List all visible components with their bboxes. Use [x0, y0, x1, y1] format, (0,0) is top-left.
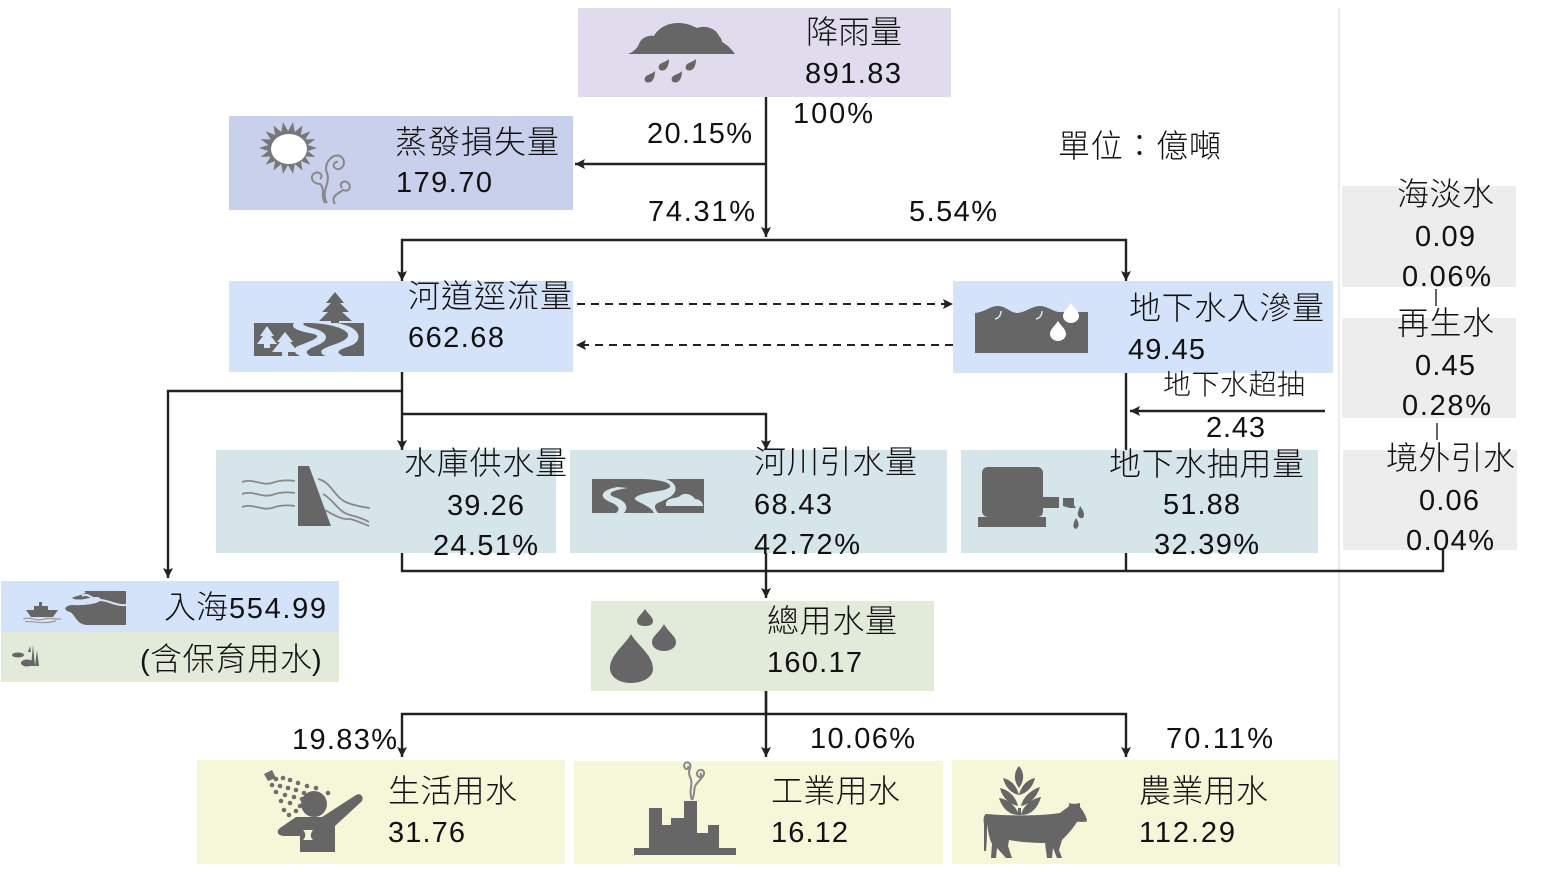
label: groundwater over-extraction [1163, 363, 1305, 444]
icon: dam [242, 466, 370, 526]
label: conservation water: 含保育用水 [150, 634, 312, 680]
panel: industrial water [574, 761, 943, 864]
value: total water use: 160.17 [767, 647, 862, 679]
label: 70.11 percent: 70.11% [1166, 723, 1273, 755]
panel: reclaimed water [1342, 298, 1516, 422]
heading: river intake: 河川引水量 [754, 437, 917, 483]
icon: ground and droplets [975, 303, 1088, 353]
value: river runoff: 662.68 [408, 322, 504, 354]
share: reclaimed water: 0.28% [1402, 390, 1491, 422]
icon: wheat and cow [984, 766, 1087, 858]
heading: evaporation: 蒸發損失量 [395, 117, 559, 163]
arrow: to reservoir [401, 372, 403, 450]
arrow: to river intake [402, 414, 766, 450]
panel: sea outflow [1, 581, 339, 682]
heading: groundwater use: 地下水抽用量 [1109, 439, 1304, 485]
value: river intake: 68.43 [754, 489, 832, 521]
label: 100 percent: 100% [793, 98, 873, 130]
share: desalination: 0.06% [1402, 261, 1491, 293]
label: 20.15 percent: 20.15% [647, 118, 752, 150]
icon: factory and smoke [634, 762, 736, 855]
share: groundwater use: 32.39% [1154, 529, 1259, 561]
heading: domestic water: 生活用水 [388, 766, 517, 812]
panel: river runoff [229, 271, 573, 372]
panel: evaporation [229, 116, 573, 210]
icon: fish and reeds [12, 645, 39, 666]
heading: reservoir supply: 水庫供水量 [404, 438, 567, 484]
label: sea outflow: 554.99 [229, 593, 326, 625]
label: 10.06 percent: 10.06% [810, 723, 915, 755]
line: desalination to reclaimed [1435, 289, 1437, 306]
heading: groundwater infiltration: 地下水入滲量 [1129, 283, 1324, 329]
icon: ship and coast [23, 591, 126, 625]
heading: river runoff: 河道逕流量 [408, 271, 572, 317]
line: groundwater to pumping [1125, 373, 1127, 450]
heading: agricultural water: 農業用水 [1139, 766, 1268, 812]
value: groundwater infiltration: 49.45 [1128, 334, 1205, 366]
panel: domestic water [197, 760, 565, 864]
panel: imported water [1343, 433, 1517, 557]
share: reservoir supply: 24.51% [433, 530, 538, 562]
value: desalination: 0.09 [1415, 221, 1475, 253]
label: 19.83 percent: 19.83% [292, 724, 397, 756]
icon: sun and vapour [259, 122, 350, 204]
value: imported water: 0.06 [1419, 485, 1479, 517]
panel: groundwater infiltration [953, 281, 1333, 373]
line: reclaimed to imported [1436, 423, 1438, 440]
share: river intake: 42.72% [754, 529, 860, 561]
value: reclaimed water: 0.45 [1415, 350, 1475, 382]
heading: desalination: 海淡水 [1397, 169, 1494, 215]
panel: reservoir supply [216, 438, 567, 562]
label: 74.31 percent: 74.31% [648, 196, 755, 228]
icon: rain cloud [628, 23, 735, 82]
panel: river intake [570, 437, 947, 561]
arrow: groundwater to river dashed [576, 344, 953, 346]
label: conservation water: ( [140, 645, 150, 677]
arrow: river to groundwater dashed [577, 303, 953, 305]
arrow: to evaporation [575, 163, 766, 165]
flow lines and arrows [168, 97, 1443, 757]
icon: river and trees [254, 292, 364, 356]
arrow: to domestic [402, 691, 766, 757]
icon: person showering [264, 770, 363, 852]
label: conservation water: ) [312, 645, 322, 677]
heading: industrial water: 工業用水 [771, 766, 900, 812]
arrow: rain to river and groundwater split [765, 97, 767, 237]
heading: imported water: 境外引水 [1386, 433, 1515, 479]
line: supply collector [402, 550, 1443, 571]
icon: pump [978, 467, 1084, 529]
value: groundwater use: 51.88 [1163, 489, 1240, 521]
panel: desalination [1342, 169, 1516, 293]
label: unit: 單位：億噸 [1058, 121, 1221, 167]
arrow: to sea [168, 391, 402, 578]
value: rainfall: 891.83 [805, 58, 901, 90]
value: industrial water: 16.12 [771, 817, 848, 849]
heading: total water use: 總用水量 [767, 596, 897, 642]
arrow: over-extraction [1130, 410, 1325, 412]
value: domestic water: 31.76 [388, 817, 465, 849]
share: imported water: 0.04% [1406, 525, 1494, 557]
panel: groundwater use [961, 439, 1318, 561]
panel: agricultural water [952, 760, 1338, 864]
arrow: to groundwater infiltration [766, 240, 1126, 281]
value: evaporation: 179.70 [396, 167, 492, 199]
label: groundwater over-extraction: 地下水超抽 [1163, 363, 1305, 403]
panel: rainfall [578, 7, 951, 97]
panel: total water use [591, 596, 934, 691]
heading: reclaimed water: 再生水 [1397, 298, 1494, 344]
arrow: to total water use [765, 553, 767, 598]
arrow: to agriculture [766, 714, 1126, 757]
value: reservoir supply: 39.26 [447, 490, 524, 522]
heading: rainfall: 降雨量 [806, 7, 902, 53]
icon: river [592, 479, 704, 513]
label: 5.54 percent: 5.54% [909, 196, 997, 228]
icon: water drops [610, 609, 676, 683]
value: agricultural water: 112.29 [1139, 817, 1235, 849]
label: sea outflow: 入海 [164, 582, 228, 628]
arrow: to river runoff [402, 240, 766, 281]
label: groundwater over-extraction: 2.43 [1206, 412, 1265, 444]
arrow: to industrial [765, 691, 767, 757]
